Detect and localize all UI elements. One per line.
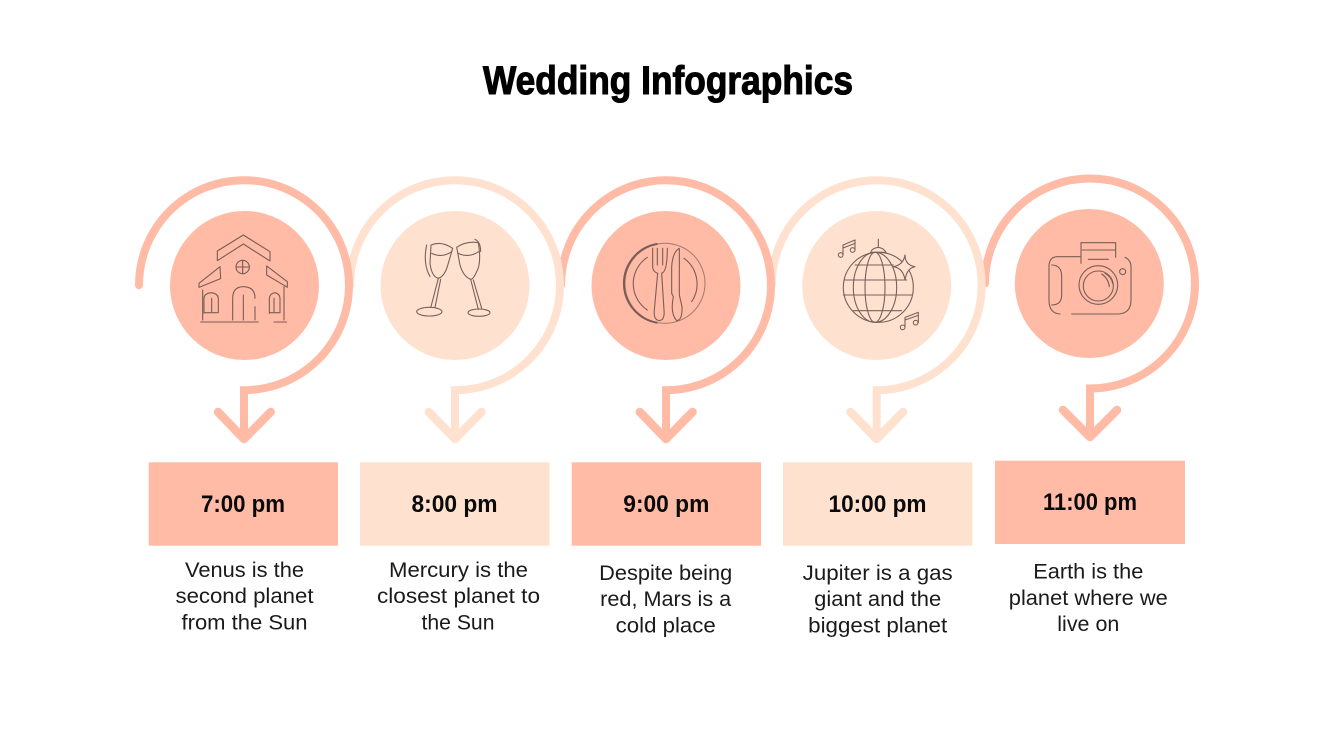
description 4: Jupiter is a gas bbox=[803, 562, 953, 585]
title: Wedding Infographics bbox=[483, 59, 853, 103]
description 4: biggest planet bbox=[808, 614, 947, 638]
icon: plate with fork and knife bbox=[624, 243, 705, 323]
arrow: ring 5 bbox=[985, 178, 1195, 437]
time 2: 8:00 pm bbox=[412, 491, 498, 518]
description 3: Despite being bbox=[599, 562, 732, 585]
description 1: Venus is the bbox=[185, 559, 304, 582]
description 1: second planet bbox=[176, 585, 314, 608]
time 4: 10:00 pm bbox=[828, 491, 926, 518]
time box 4 bbox=[783, 462, 972, 546]
icon circle 1 bbox=[170, 211, 319, 360]
arrow: ring 1 bbox=[139, 180, 349, 439]
description 4: giant and the bbox=[814, 588, 941, 611]
time 1: 7:00 pm bbox=[201, 491, 285, 518]
description 2: closest planet to bbox=[377, 585, 540, 608]
time box 1 bbox=[149, 462, 338, 546]
description 1: from the Sun bbox=[182, 612, 308, 634]
arrow: ring 2 bbox=[350, 180, 560, 439]
icon circle 5 bbox=[1015, 209, 1164, 358]
time box 5 bbox=[995, 461, 1185, 544]
step 4 bbox=[783, 211, 972, 638]
step 3 bbox=[572, 211, 761, 638]
description 2: Mercury is the bbox=[389, 559, 528, 582]
icon circle 3 bbox=[592, 211, 740, 360]
description 2 bbox=[377, 559, 540, 634]
icon circle 2 bbox=[380, 211, 530, 360]
arrow: ring 3 bbox=[561, 180, 771, 439]
description 3: cold place bbox=[616, 614, 716, 638]
time box 2 bbox=[360, 462, 550, 546]
description 1 bbox=[176, 559, 314, 634]
icon circle 4 bbox=[802, 211, 951, 360]
description 5: Earth is the bbox=[1033, 560, 1143, 584]
description 3 bbox=[599, 562, 732, 638]
description 3: red, Mars is a bbox=[600, 588, 732, 611]
time box 3 bbox=[572, 462, 761, 546]
step 5 bbox=[995, 209, 1185, 636]
icon: church bbox=[199, 235, 287, 322]
description 5: live on bbox=[1057, 613, 1119, 636]
icon: camera bbox=[1049, 243, 1131, 314]
arrow: ring 4 bbox=[772, 180, 982, 439]
description 4 bbox=[803, 562, 953, 638]
icon: champagne glasses bbox=[417, 239, 490, 316]
description 5: planet where we bbox=[1009, 587, 1168, 610]
description 2: the Sun bbox=[422, 612, 494, 634]
icon: disco ball bbox=[838, 239, 918, 330]
step 1 bbox=[149, 211, 338, 634]
time 5: 11:00 pm bbox=[1043, 489, 1137, 516]
time 3: 9:00 pm bbox=[623, 491, 709, 518]
description 5 bbox=[1009, 560, 1168, 636]
step 2 bbox=[360, 211, 550, 634]
